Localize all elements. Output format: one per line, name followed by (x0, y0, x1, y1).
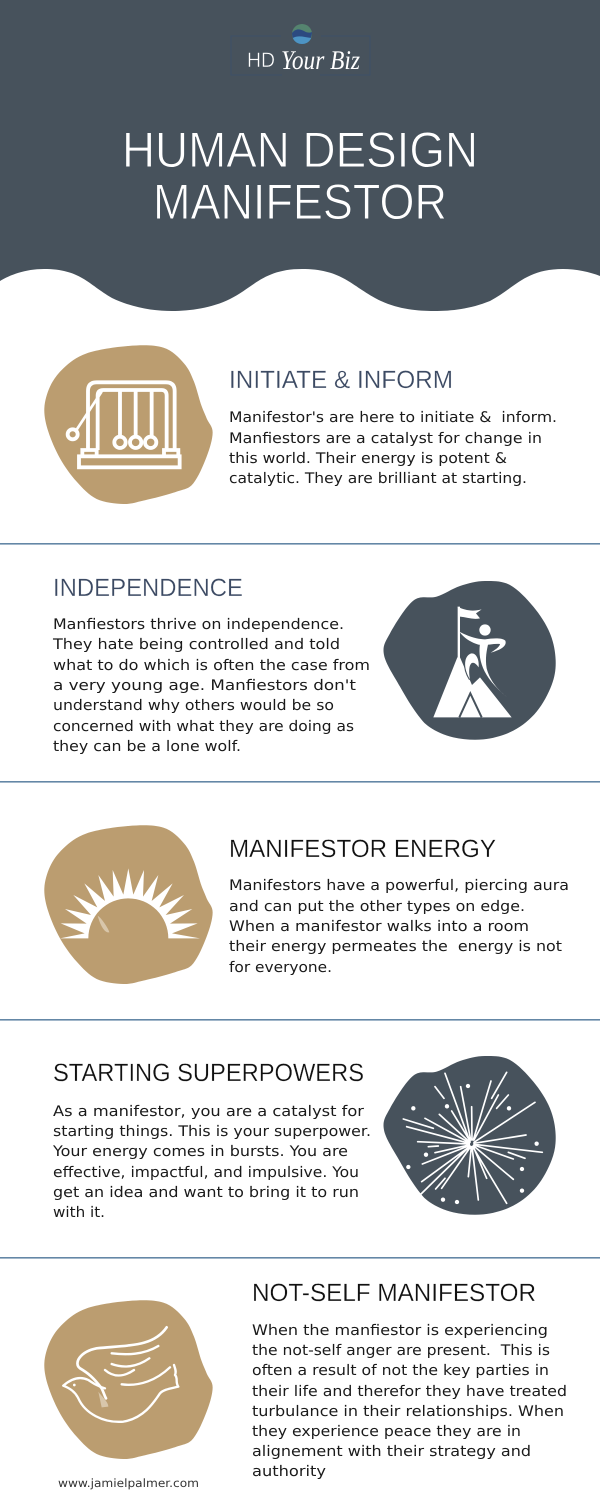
text block: Manfiestors thrive on independence. (53, 616, 344, 633)
title (122, 122, 478, 230)
panel: starting superpowers (52, 1059, 371, 1221)
icon: firework burst on dark blob (384, 1056, 556, 1215)
text block: Your energy comes in bursts. You are (52, 1143, 348, 1160)
heading: MANIFESTOR ENERGY (229, 835, 496, 863)
text block: for everyone. (229, 959, 332, 976)
heading: STARTING SUPERPOWERS (53, 1059, 364, 1087)
text block: their life and therefor they have treated (252, 1383, 567, 1400)
text block (229, 877, 569, 976)
text block: They hate being controlled and told (52, 636, 340, 653)
header wave background (0, 0, 600, 311)
text block: understand why others would be so (53, 697, 334, 714)
icon: dove on tan blob (44, 1300, 213, 1459)
icon: rising sun on tan blob (44, 825, 213, 984)
text block: When a manifestor walks into a room (229, 918, 529, 935)
text block: catalytic. They are brilliant at starting. (229, 470, 527, 487)
panel: independence (52, 574, 370, 755)
text block: they experience peace they are in (252, 1423, 521, 1440)
footer website url: www.jamielpalmer.com (58, 1476, 199, 1490)
logo wordmark Your Biz: Your Biz (281, 45, 360, 75)
panel: not-self manifestor (252, 1279, 567, 1480)
text block: often a result of not the key parties in (252, 1362, 549, 1379)
text block: Manifestor's are here to initiate & inform. (229, 409, 557, 426)
heading: INDEPENDENCE (53, 574, 243, 602)
title: MANIFESTOR (153, 174, 447, 230)
text block: a very young age. Manfiestors don't (53, 677, 356, 694)
text block (52, 1103, 371, 1221)
text block: and can put the other types on edge. (229, 898, 525, 915)
text block: they can be a lone wolf. (53, 738, 241, 755)
heading: NOT-SELF MANIFESTOR (252, 1279, 536, 1307)
heading: INITIATE & INFORM (229, 366, 453, 394)
text block: what to do which is often the case from (53, 657, 370, 674)
text block: the not-self anger are present. This is (252, 1342, 550, 1359)
text block: this world. Their energy is potent & (229, 450, 507, 467)
text block: turbulance in their relationships. When (252, 1403, 564, 1420)
text block: When the manfiestor is experiencing (252, 1322, 548, 1339)
title: HUMAN DESIGN (122, 122, 478, 178)
text block: Manfiestors are a catalyst for change in (229, 430, 542, 447)
text block: authority (252, 1463, 326, 1480)
text block: starting things. This is your superpower. (53, 1123, 371, 1140)
text block: As a manifestor, you are a catalyst for (53, 1103, 364, 1120)
logo wordmark HD: HD (247, 49, 275, 72)
text block (252, 1322, 567, 1480)
icon: newton's cradle on tan blob (44, 345, 213, 504)
text block: get an idea and want to bring it to run (53, 1184, 359, 1201)
text block: with it. (53, 1204, 105, 1221)
text block: Manifestors have a powerful, piercing aura (229, 877, 569, 894)
text block: their energy permeates the energy is not (229, 938, 562, 955)
logo mark circle (292, 24, 312, 44)
text block: effective, impactful, and impulsive. You (53, 1164, 359, 1181)
panel: manifestor energy (229, 835, 569, 976)
text block: concerned with what they are doing as (53, 718, 354, 735)
text block (229, 409, 557, 487)
icon: climber with flag on dark blob (384, 581, 556, 740)
text block: alignement with their strategy and (252, 1443, 531, 1460)
logo (231, 24, 370, 75)
text block (52, 616, 370, 755)
panel: initiate and inform (229, 366, 557, 487)
